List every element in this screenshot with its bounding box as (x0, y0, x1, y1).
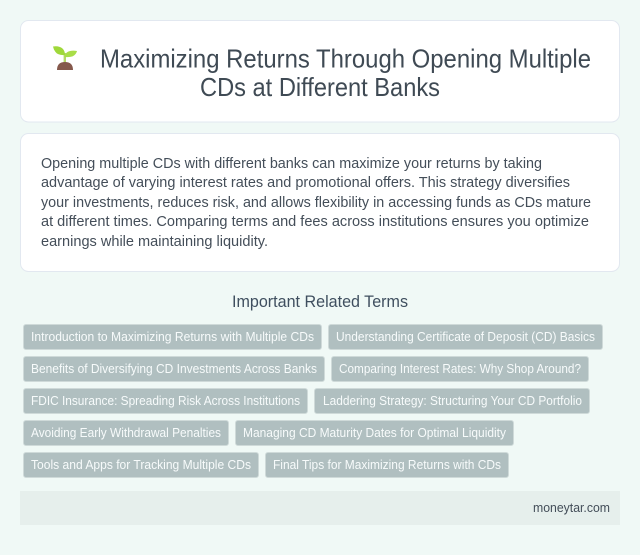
tag (236, 420, 514, 446)
tag (266, 452, 508, 478)
text block: description: earnings while maintaining liquidity. (41, 234, 268, 250)
tag: FDIC Insurance: Spreading Risk Across Institutions (31, 393, 300, 408)
text block: description: at different times. Comparing terms and fees across institutions ensures you optimize (41, 214, 589, 230)
tag (24, 452, 258, 478)
title: Maximizing Returns Through Opening Multiple (100, 44, 591, 74)
tag: Understanding Certificate of Deposit (CD) Basics (336, 329, 595, 344)
panel: title header (20, 20, 620, 122)
panel: description (20, 134, 620, 272)
tag: Introduction to Maximizing Returns with Multiple CDs (31, 329, 314, 344)
tag (24, 388, 308, 414)
title: CDs at Different Banks (200, 72, 440, 102)
tag: Benefits of Diversifying CD Investments Across Banks (31, 361, 317, 376)
tag: Comparing Interest Rates: Why Shop Around? (339, 361, 581, 376)
text block: description: Opening multiple CDs with different banks can maximize your returns by taking (41, 156, 542, 172)
tag: Final Tips for Maximizing Returns with CDs (273, 457, 501, 472)
tag: Avoiding Early Withdrawal Penalties (31, 425, 221, 440)
tag: Laddering Strategy: Structuring Your CD Portfolio (323, 393, 582, 408)
title (100, 44, 591, 102)
text block: description: advantage of varying interest rates and promotional offers. This strategy diversifies (41, 175, 570, 191)
tag (24, 356, 324, 382)
panel: related term tags (24, 324, 602, 478)
footer (20, 491, 620, 525)
tag (24, 324, 322, 350)
text block: description: your investments, reduces risk, and allows flexibility in accessing funds as CDs mature (41, 195, 591, 211)
footer: moneytar.com (533, 501, 610, 515)
tag: Managing CD Maturity Dates for Optimal Liquidity (243, 425, 507, 440)
tag (314, 388, 590, 414)
text block: description (41, 156, 591, 250)
tag (24, 420, 228, 446)
tag (328, 324, 602, 350)
heading: related terms: Important Related Terms (232, 293, 408, 311)
tag (332, 356, 588, 382)
tag: Tools and Apps for Tracking Multiple CDs (31, 457, 251, 472)
icon: seedling (53, 46, 77, 70)
